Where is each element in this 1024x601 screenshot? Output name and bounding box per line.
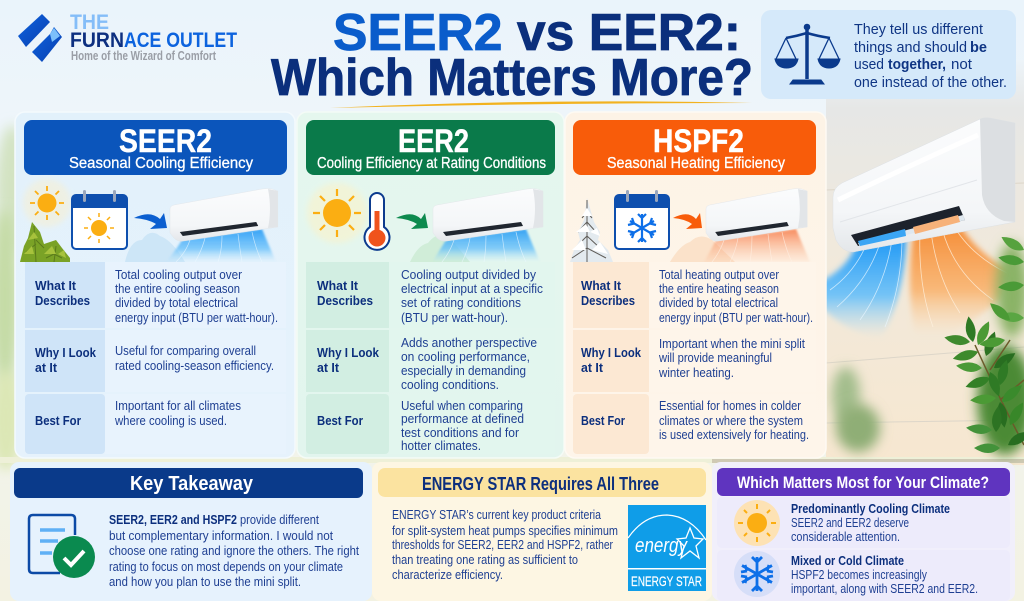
rows (306, 262, 555, 454)
rows: electrical input at a specific (401, 281, 543, 296)
takeaway text: provide different (240, 512, 319, 527)
panel: climate guidance (712, 462, 1015, 601)
rows: energy input (BTU per watt-hour). (115, 310, 278, 325)
heading: SEER2 (24, 120, 287, 175)
rows: at It (35, 360, 58, 375)
heading: energy star (378, 468, 706, 497)
rows: winter heating. (658, 365, 734, 380)
rows: Essential for homes in colder (659, 398, 802, 413)
rows: What It (35, 278, 77, 293)
rows: Why I Look (581, 345, 642, 360)
energy star text: characterize efficiency. (392, 567, 503, 582)
logo mark (18, 14, 62, 62)
rows: What It (317, 278, 359, 293)
icon: mini split unit (433, 188, 543, 241)
icon: tree (20, 222, 70, 262)
logo: The Furnace Outlet: ACE OUTLET (124, 29, 237, 52)
airflow (704, 229, 810, 262)
rows: (BTU per watt-hour). (401, 310, 508, 325)
panel: energy star (372, 462, 712, 601)
callout text: used (854, 56, 884, 73)
icon: balance scale (775, 24, 840, 84)
icon: sun (23, 179, 71, 227)
icon: sun (307, 183, 367, 243)
panel: HSPF2 (565, 112, 826, 458)
icon: sun (734, 500, 780, 546)
icon: calendar with snowflake (615, 190, 669, 249)
rows: Describes (35, 293, 90, 308)
rows: hotter climates. (401, 438, 481, 453)
logo: The Furnace Outlet: Home of the Wizard of Comfort (71, 49, 217, 63)
energy star text: thresholds for SEER2, EER2 and HSPF2, rather (392, 537, 614, 552)
heading: EER2 (306, 120, 555, 175)
rows: Important for all climates (115, 398, 241, 413)
rows: climates or where the system (659, 413, 803, 428)
rows: energy input (BTU per watt-hour). (659, 310, 813, 325)
row: cooling climate: considerable attention. (791, 529, 900, 544)
rows: Cooling output divided by (401, 267, 536, 282)
logo: energy star (628, 505, 706, 591)
icon: mini split unit (706, 188, 807, 241)
illustration: SEER2 (20, 179, 278, 262)
heading: EER2: Cooling Efficiency at Rating Conditions (317, 155, 546, 172)
heading: energy star: ENERGY STAR Requires All Three (422, 474, 659, 494)
callout text: one instead of the other. (854, 74, 1007, 91)
rows: Why I Look (35, 345, 97, 360)
icon: calendar with sun (72, 190, 127, 249)
heading: HSPF2 (573, 120, 816, 175)
rows: divided by total electrical (659, 295, 778, 310)
takeaway text: SEER2, EER2 and HSPF2 (109, 512, 237, 527)
row: mixed or cold climate: Mixed or Cold Climate (791, 553, 904, 568)
row: cooling climate (717, 497, 1010, 548)
rows: Best For (35, 413, 81, 428)
logo: The Furnace Outlet: THE (70, 11, 109, 34)
takeaway text: but complementary information. I would not (109, 528, 333, 543)
rows: test conditions and for (401, 425, 520, 440)
energy star text: for split-system heat pumps specifies minimum (392, 523, 618, 538)
takeaway text: choose one rating and ignore the others. The right (109, 543, 359, 558)
icon: snowy tree (570, 198, 613, 262)
callout text (854, 21, 1007, 91)
rows: the entire cooling season (115, 281, 240, 296)
rows: performance at defined (401, 411, 524, 426)
energy star text (392, 507, 618, 582)
rows: the entire heating season (659, 281, 779, 296)
row: cooling climate: SEER2 and EER2 deserve (791, 515, 909, 530)
arrow (673, 213, 702, 229)
heading: SEER2: Seasonal Cooling Efficiency (69, 155, 253, 172)
energy star text: ENERGY STAR’s current key product criteria (392, 507, 602, 522)
rows: Why I Look (317, 345, 380, 360)
arrow (134, 213, 167, 229)
icon: checklist document (29, 515, 95, 578)
rows: is used extensively for heating. (659, 427, 809, 442)
gold swoosh under title (330, 101, 752, 108)
rows (573, 262, 816, 454)
logo: The Furnace Outlet (18, 11, 237, 63)
rows: at It (317, 360, 340, 375)
airflow (432, 229, 540, 262)
heading: HSPF2: Seasonal Heating Efficiency (607, 155, 785, 172)
rows: Important when the mini split (659, 336, 805, 351)
rows: Best For (317, 413, 363, 428)
unit body (833, 118, 1015, 252)
row: mixed or cold climate: important, along with SEER2 and EER2. (791, 581, 978, 596)
rows: Total heating output over (659, 267, 780, 282)
rows: What It (581, 278, 622, 293)
logo: The Furnace Outlet: FURN (70, 29, 124, 52)
rows: Describes (581, 293, 635, 308)
rows: rated cooling-season efficiency. (115, 358, 274, 373)
panel: EER2 (297, 112, 564, 458)
rows: Total cooling output over (115, 267, 243, 282)
takeaway text: and how you plan to use the mini split. (109, 574, 301, 589)
icon: mini split unit (170, 188, 278, 241)
illustration: HSPF2 (570, 188, 810, 262)
logo: energy star: energy (635, 535, 688, 557)
row: cooling climate: Predominantly Cooling Climate (791, 501, 950, 516)
row: mixed or cold climate: HSPF2 becomes increasingly (791, 567, 927, 582)
airflow: cool (820, 233, 906, 338)
callout text: They tell us different (854, 21, 984, 38)
heading: key takeaway: Key Takeaway (130, 473, 254, 495)
rows: Useful for comparing overall (115, 343, 256, 358)
heading: EER2: EER2 (398, 123, 469, 159)
rows: set of rating conditions (401, 295, 521, 310)
heading: HSPF2: HSPF2 (653, 123, 744, 159)
callout text: together, (888, 56, 946, 73)
plant: right foreground (832, 233, 1024, 455)
energy star text: than treating one rating as sufficient to (392, 552, 578, 567)
title: Which Matters More? (271, 49, 753, 107)
illustration: EER2 (307, 183, 543, 262)
rows: Useful when comparing (401, 398, 523, 413)
rows (25, 262, 286, 454)
rows: Describes (317, 293, 373, 308)
airflow: warm (910, 220, 1012, 336)
title (271, 4, 753, 107)
rows: Best For (581, 413, 625, 428)
rows: Adds another perspective (401, 335, 537, 350)
takeaway text: rating to focus on most depends on your climate (109, 559, 343, 574)
rows: on cooling performance, (401, 349, 530, 364)
title: SEER2 vs EER2: (333, 4, 741, 62)
panel: key takeaway (10, 462, 372, 601)
rows: at It (581, 360, 604, 375)
rows: where cooling is used. (114, 413, 227, 428)
icon: snowflake (734, 551, 780, 597)
callout text: be (970, 39, 987, 56)
arrow (396, 213, 428, 229)
heading: SEER2: SEER2 (119, 123, 212, 159)
takeaway text (109, 512, 359, 589)
rows: divided by total electrical (115, 295, 238, 310)
logo: energy star: ENERGY STAR (631, 573, 702, 589)
heading: climate (717, 468, 1010, 496)
rows: will provide meaningful (658, 350, 772, 365)
callout text: things and should (854, 39, 967, 56)
icon: thermometer (364, 193, 390, 250)
heading: key takeaway (14, 468, 363, 498)
rows: especially in demanding (401, 363, 526, 378)
callout: use together (761, 10, 1016, 99)
row: mixed or cold climate (717, 550, 1010, 601)
large air conditioner with airflow (820, 118, 1015, 338)
panel: SEER2 (15, 112, 295, 458)
rows: cooling conditions. (401, 377, 499, 392)
airflow (166, 229, 276, 262)
callout text: not (951, 56, 973, 73)
